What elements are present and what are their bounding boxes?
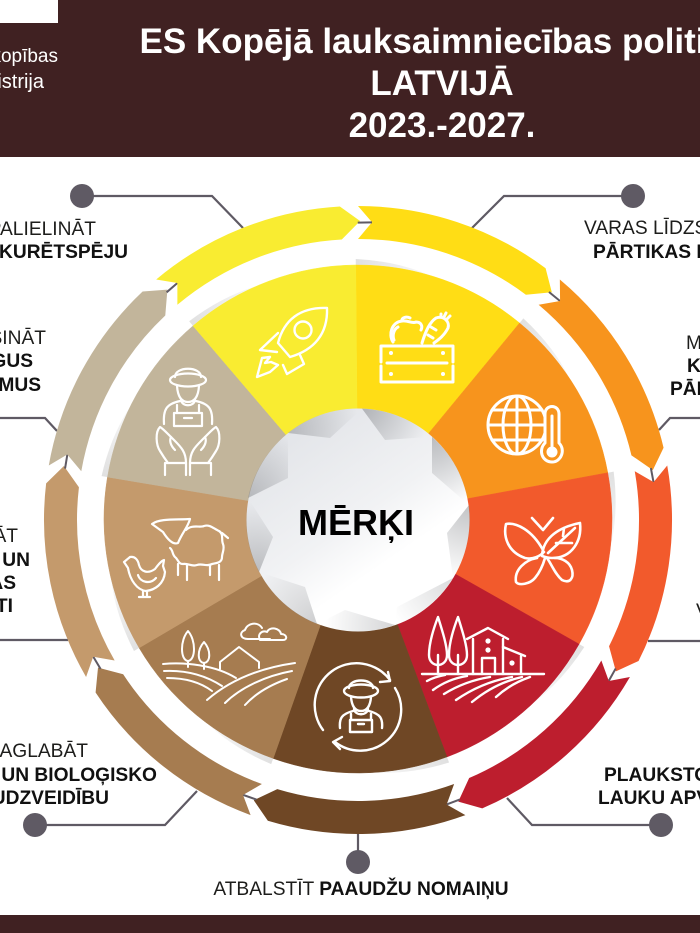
- arrow: globe segment: [499, 279, 700, 482]
- label: food and health quality: [0, 526, 30, 617]
- icon: landscape: [163, 624, 295, 705]
- label: landscape and biodiversity: [0, 741, 157, 809]
- title: LATVIJĀ: [370, 64, 514, 103]
- title: [140, 22, 700, 145]
- leader lines and dots: [0, 184, 700, 874]
- bottom band: [0, 915, 700, 933]
- label: rural areas: [598, 764, 700, 809]
- hub label: MĒRĶI: [298, 502, 414, 543]
- icon: farm: [422, 617, 544, 702]
- icon: sheep and chicken: [124, 519, 228, 597]
- label: generational renewal: ATBALSTĪT PAAUDŽU NOMAIŅU: [213, 878, 509, 900]
- label: food chain balance: [584, 218, 700, 263]
- arrow: rocket segment: [156, 150, 372, 352]
- arrow: crate segment: [358, 206, 560, 301]
- icon: farmer in cycle: [315, 663, 401, 751]
- pie of nine sectors: [54, 217, 649, 816]
- central hub: [246, 408, 470, 632]
- label: incomes: [0, 327, 46, 396]
- icon: farmer with hands: [157, 369, 219, 475]
- arrow: income segment: [49, 267, 177, 482]
- arrow: animal segment: [0, 455, 168, 677]
- arrow: butterfly segment: [574, 465, 700, 681]
- icon: butterfly leaf: [505, 518, 580, 584]
- arrow: landscape segment: [61, 657, 283, 815]
- arrow: generational renewal segment: [243, 726, 465, 884]
- arrow: farm segment: [447, 630, 630, 852]
- icon: globe with thermometer: [488, 396, 562, 462]
- outer ring of arrows: [0, 150, 700, 884]
- header band: [0, 0, 700, 157]
- icon: rocket: [257, 308, 327, 377]
- title: 2023.-2027.: [349, 106, 535, 145]
- icon: crate of produce: [381, 313, 453, 382]
- logo block: [0, 0, 58, 93]
- label: climate: [670, 333, 700, 400]
- label: competitiveness: [0, 219, 128, 263]
